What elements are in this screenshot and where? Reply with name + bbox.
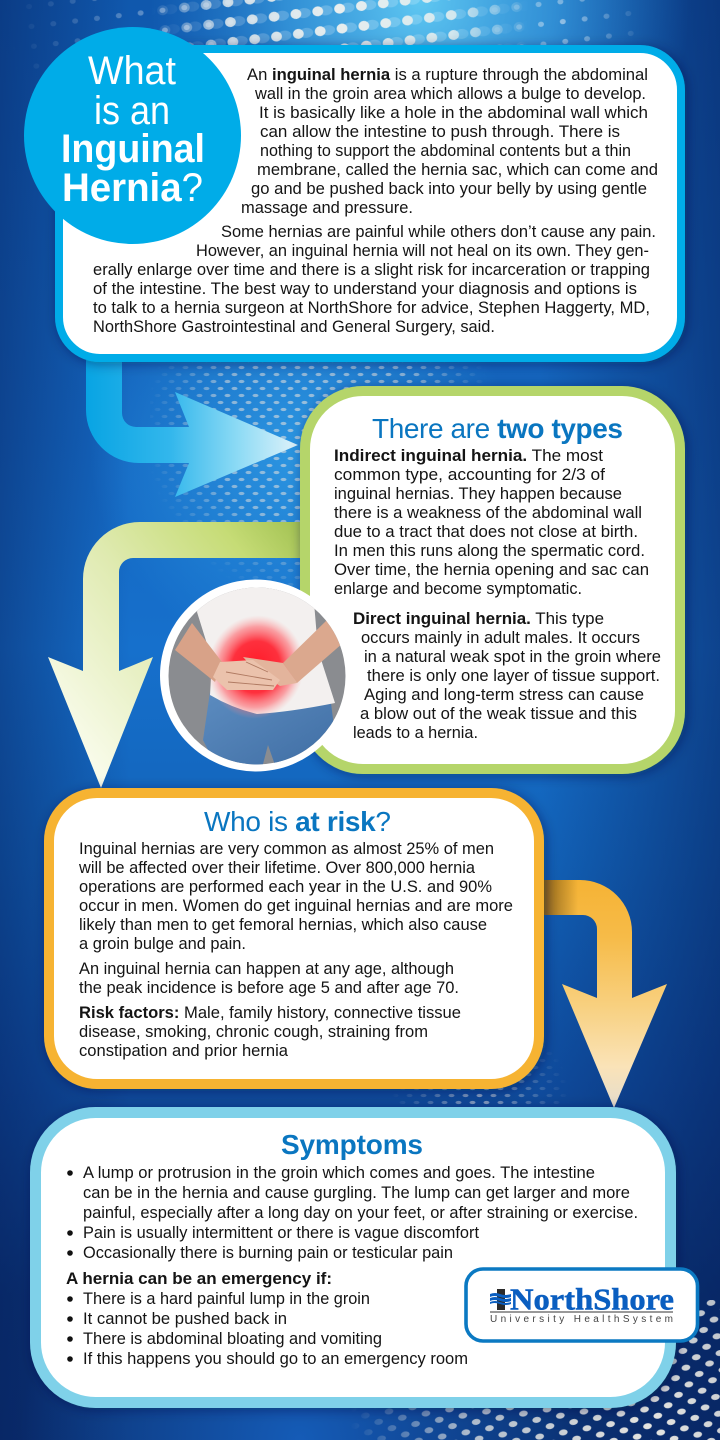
- emergency list: If this happens you should go to an emergency room: [83, 1349, 468, 1368]
- indirect hernia text: there is a weakness of the abdominal wall: [334, 503, 642, 522]
- direct hernia text: leads to a hernia.: [353, 723, 478, 742]
- intro text: However, an inguinal hernia will not heal on its own. They gen-: [196, 241, 649, 260]
- symptoms list: Pain is usually intermittent or there is vague discomfort: [83, 1223, 479, 1242]
- intro text: erally enlarge over time and there is a slight risk for incarceration or trapping: [93, 260, 650, 279]
- intro text: to talk to a hernia surgeon at NorthShore for advice, Stephen Haggerty, MD,: [93, 298, 650, 317]
- indirect hernia text: Over time, the hernia opening and sac can: [334, 560, 649, 579]
- risk text: a groin bulge and pain.: [79, 934, 246, 953]
- heading: Symptoms: [281, 1129, 423, 1160]
- panel: symptoms: [36, 1112, 670, 1402]
- icon: cross and waves: [490, 1289, 511, 1310]
- photo: man holding abdomen: [160, 580, 352, 772]
- intro text: wall in the groin area which allows a bulge to develop.: [254, 84, 646, 103]
- intro text: [93, 65, 658, 336]
- symptoms list: Occasionally there is burning pain or testicular pain: [83, 1243, 453, 1262]
- intro text: Some hernias are painful while others don’t cause any pain.: [221, 222, 656, 241]
- direct hernia text: there is only one layer of tissue support.: [367, 666, 660, 685]
- direct hernia text: Direct inguinal hernia. This type: [353, 609, 604, 628]
- intro text: NorthShore Gastrointestinal and General Surgery, said.: [93, 317, 495, 336]
- intro text: It is basically like a hole in the abdominal wall which: [259, 103, 648, 122]
- title circle: Inguinal: [61, 127, 205, 171]
- risk text: the peak incidence is before age 5 and after age 70.: [79, 978, 459, 997]
- title circle: Hernia?: [62, 166, 203, 210]
- indirect hernia text: Indirect inguinal hernia. The most: [334, 446, 603, 465]
- risk text: Risk factors: Male, family history, connective tissue: [79, 1003, 461, 1022]
- risk text: operations are performed each year in the U.S. and 90%: [79, 877, 492, 896]
- indirect hernia text: enlarge and become symptomatic.: [334, 579, 582, 598]
- panel: two types: [305, 391, 680, 769]
- direct hernia text: Aging and long-term stress can cause: [364, 685, 644, 704]
- risk text: An inguinal hernia can happen at any age, although: [79, 959, 454, 978]
- symptoms list: A lump or protrusion in the groin which comes and goes. The intestine: [83, 1163, 595, 1182]
- intro text: An inguinal hernia is a rupture through the abdominal: [247, 65, 648, 84]
- indirect hernia text: inguinal hernias. They happen because: [334, 484, 622, 503]
- logo: NorthShore: [466, 1269, 698, 1341]
- heading: There are two types: [372, 413, 623, 444]
- title circle: [24, 27, 241, 244]
- title circle: What: [88, 49, 176, 93]
- symptoms list: can be in the hernia and cause gurgling. The lump can get larger and more: [83, 1183, 630, 1202]
- indirect hernia text: [334, 446, 649, 598]
- intro text: massage and pressure.: [241, 198, 413, 217]
- arrow: blue: [86, 360, 298, 497]
- indirect hernia text: In men this runs along the spermatic cord.: [334, 541, 645, 560]
- intro text: membrane, called the hernia sac, which can come and: [257, 160, 658, 179]
- panel: what is an inguinal hernia: [24, 27, 681, 358]
- emergency list: It cannot be pushed back in: [83, 1309, 287, 1328]
- risk text: constipation and prior hernia: [79, 1041, 289, 1060]
- direct hernia text: occurs mainly in adult males. It occurs: [361, 628, 640, 647]
- symptoms list: [67, 1163, 638, 1262]
- intro text: can allow the intestine to push through. There is: [260, 122, 620, 141]
- intro text: nothing to support the abdominal contents but a thin: [260, 141, 631, 160]
- intro text: of the intestine. The best way to understand your diagnosis and options is: [93, 279, 637, 298]
- emergency list: [66, 1269, 468, 1368]
- risk text: [78, 839, 513, 1060]
- heading: Who is at risk?: [204, 806, 391, 837]
- direct hernia text: in a natural weak spot in the groin where: [364, 647, 661, 666]
- direct hernia text: [353, 609, 661, 742]
- emergency list: There is abdominal bloating and vomiting: [83, 1329, 382, 1348]
- logo: NorthShore: University HealthSystem: [490, 1314, 673, 1325]
- title circle: is an: [94, 89, 170, 133]
- emergency list: There is a hard painful lump in the groin: [83, 1289, 370, 1308]
- logo: NorthShore: NorthShore: [510, 1282, 674, 1316]
- indirect hernia text: due to a tract that does not close at birth.: [334, 522, 638, 541]
- intro text: go and be pushed back into your belly by using gentle: [251, 179, 647, 198]
- symptoms list: painful, especially after a long day on your feet, or after straining or exercise.: [83, 1203, 638, 1222]
- risk text: likely than men to get femoral hernias, which also cause: [79, 915, 487, 934]
- risk text: occur in men. Women do get inguinal hernias and are more: [79, 896, 513, 915]
- panel: who is at risk: [49, 793, 539, 1084]
- direct hernia text: a blow out of the weak tissue and this: [360, 704, 637, 723]
- indirect hernia text: common type, accounting for 2/3 of: [334, 465, 605, 484]
- arrow: orange: [540, 880, 667, 1108]
- risk text: Inguinal hernias are very common as almost 25% of men: [79, 839, 494, 858]
- arrow: green: [48, 522, 304, 788]
- risk text: will be affected over their lifetime. Over 800,000 hernia: [78, 858, 476, 877]
- emergency list: A hernia can be an emergency if:: [66, 1269, 332, 1288]
- risk text: disease, smoking, chronic cough, straining from: [79, 1022, 428, 1041]
